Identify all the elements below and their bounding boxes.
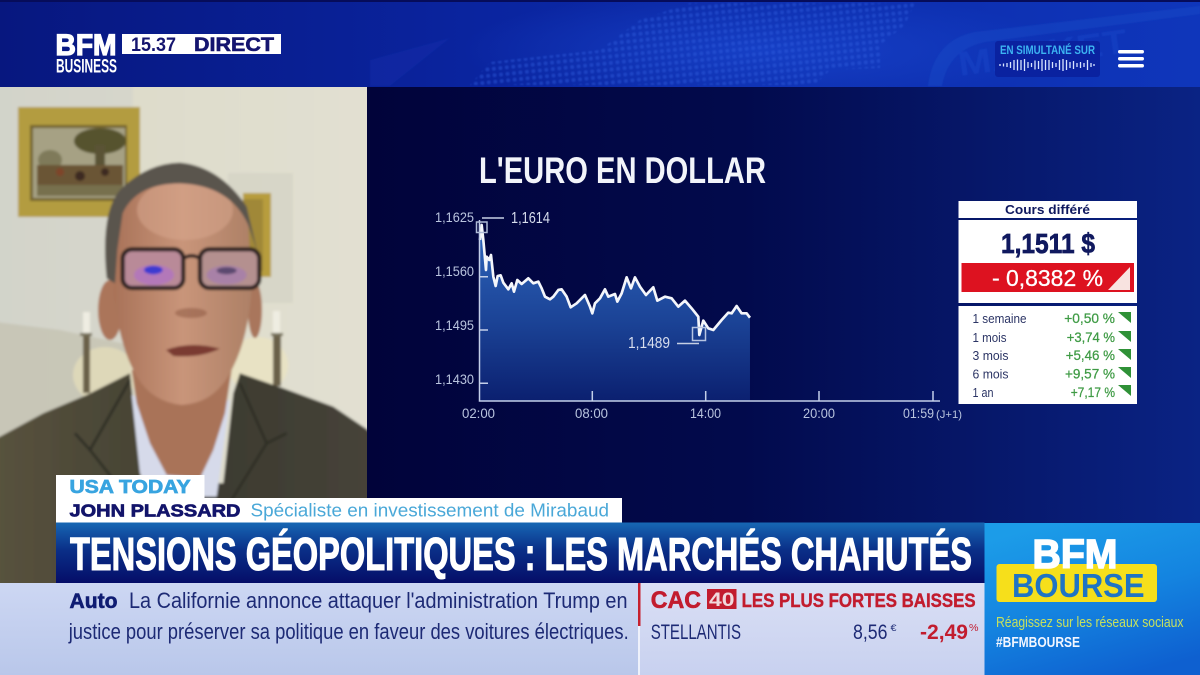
stock ticker: CAC 40: % — [969, 623, 979, 634]
guest name bar — [56, 498, 622, 522]
logo: BFM Bourse — [996, 531, 1157, 604]
news ticker — [0, 583, 640, 675]
performance table: 1 mois — [972, 330, 1007, 345]
video of the guest — [0, 87, 367, 583]
header band — [0, 2, 1200, 87]
performance table: 1 semaine — [972, 311, 1026, 326]
shirt — [132, 395, 230, 497]
axes — [479, 220, 940, 401]
performance table — [958, 306, 1137, 404]
news ticker: La Californie annonce attaquer l'administration Trump en — [129, 588, 628, 613]
stock ticker: CAC 40: -2,49 — [920, 621, 968, 644]
chart title: L'EURO EN DOLLAR — [479, 150, 766, 191]
simulcast badge — [995, 41, 1100, 77]
header band: MARKET — [956, 23, 1130, 84]
high marker: 1,1614 — [511, 210, 550, 227]
performance table: +7,17 % — [1071, 384, 1115, 400]
delayed quote header — [958, 201, 1137, 218]
quote card — [958, 201, 1137, 404]
simulcast badge: EN SIMULTANÉ SUR — [1000, 44, 1096, 57]
y axis labels: 1,1430 — [435, 371, 474, 387]
chart panel background — [367, 87, 1200, 527]
neck — [132, 370, 232, 478]
x axis labels: (J+1) — [936, 409, 962, 421]
icon: up triangles — [1118, 312, 1131, 396]
face — [113, 180, 252, 405]
ears — [98, 280, 122, 340]
y axis labels: 1,1625 — [435, 209, 474, 225]
x axis labels: 14:00 — [690, 405, 721, 421]
hair — [105, 163, 257, 283]
price area and line — [480, 225, 750, 401]
performance table: +9,57 % — [1065, 366, 1115, 382]
jacket — [0, 372, 367, 583]
painting right — [243, 193, 271, 277]
programme tag: USA TODAY — [70, 476, 191, 497]
low marker — [628, 328, 706, 352]
forehead highlight — [137, 180, 233, 240]
performance table: +5,46 % — [1066, 347, 1115, 363]
guest name bar: JOHN PLASSARD — [70, 500, 240, 520]
x axis labels — [462, 405, 962, 421]
stock ticker: CAC 40: LES PLUS FORTES BAISSES — [742, 591, 976, 612]
x axis labels: 02:00 — [462, 405, 495, 421]
programme tag — [56, 475, 204, 498]
stock ticker: CAC 40: 8,56 — [853, 621, 888, 644]
performance table: +3,74 % — [1067, 329, 1115, 345]
daily change: - 0,8382 % — [992, 265, 1103, 291]
stock ticker: CAC 40: CAC — [651, 587, 701, 614]
clock and direct badge: 15.37 — [131, 35, 176, 56]
performance table: 3 mois — [972, 348, 1009, 363]
performance table: 6 mois — [972, 366, 1009, 382]
x axis labels: 20:00 — [803, 405, 835, 421]
clock and direct badge — [122, 34, 281, 56]
current price: 1,1511 $ — [1001, 228, 1095, 259]
channel logo: BFM Business: BUSINESS — [56, 56, 117, 78]
y axis labels: 1,1495 — [435, 317, 474, 333]
x axis labels: 08:00 — [575, 405, 608, 421]
stock ticker: CAC 40: STELLANTIS — [651, 621, 741, 644]
candlestick right — [271, 311, 283, 386]
mouth — [166, 345, 220, 356]
icon: menu — [1118, 50, 1144, 68]
performance table: 1 an — [972, 385, 994, 400]
logo: BFM Bourse: BFM — [1032, 531, 1118, 577]
clock and direct badge: DIRECT — [194, 35, 274, 56]
news ticker: justice pour préserver sa politique en faveur des voitures électriques. — [68, 619, 629, 644]
news ticker: Auto — [70, 590, 118, 613]
y axis labels: 1,1560 — [435, 263, 474, 279]
logo: BFM Bourse: BOURSE — [1012, 567, 1144, 604]
guest name bar: Spécialiste en investissement de Mirabaud — [250, 500, 609, 520]
nose shadow — [175, 308, 207, 318]
low marker: 1,1489 — [628, 335, 670, 352]
performance table: +0,50 % — [1064, 310, 1115, 326]
stock ticker: CAC 40 — [638, 583, 984, 675]
x axis labels: 01:59 — [903, 405, 934, 421]
glasses — [123, 249, 259, 288]
current price — [958, 220, 1137, 303]
promo panel: BFM Bourse: #BFMBOURSE — [996, 635, 1080, 651]
stock ticker: CAC 40: 40 — [709, 590, 734, 611]
channel logo: BFM Business: BFM — [56, 29, 116, 62]
high marker — [476, 210, 550, 232]
y axis labels — [435, 209, 474, 387]
channel logo: BFM Business — [56, 29, 117, 78]
promo panel: BFM Bourse — [984, 523, 1200, 675]
jacket lapels — [74, 380, 286, 498]
delayed quote header: Cours différé — [1005, 203, 1090, 217]
line chart: euro in dollar — [435, 209, 962, 421]
stock ticker: CAC 40: € — [890, 623, 896, 633]
icon: audio waveform — [1000, 59, 1094, 71]
daily change — [962, 263, 1134, 292]
painting left — [18, 107, 140, 217]
candlestick left — [80, 312, 92, 393]
